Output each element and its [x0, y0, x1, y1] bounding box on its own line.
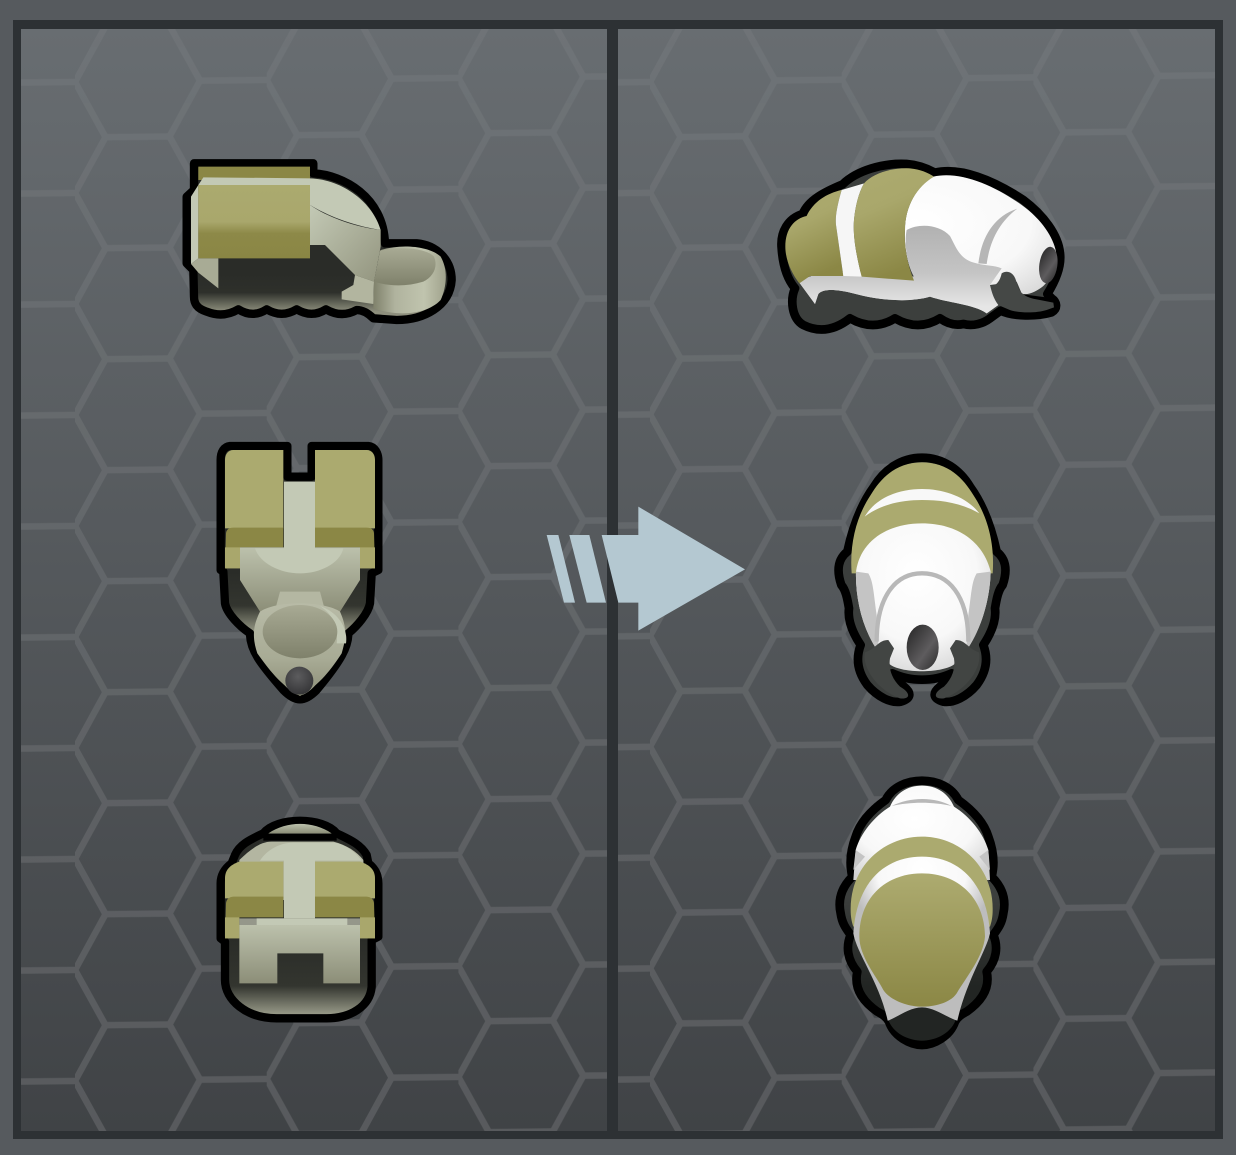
icon: before, front view	[221, 446, 378, 699]
icon: after, rear view	[840, 781, 1004, 1045]
icon: before, rear view	[221, 821, 378, 1018]
icon: before, side view	[187, 163, 452, 320]
icon: after, front view	[839, 458, 1005, 702]
icon: after, side view	[781, 164, 1060, 330]
panel: after (right)	[618, 29, 1215, 1131]
panel: before (left)	[21, 29, 607, 1131]
arrow: transformation direction	[547, 507, 745, 631]
